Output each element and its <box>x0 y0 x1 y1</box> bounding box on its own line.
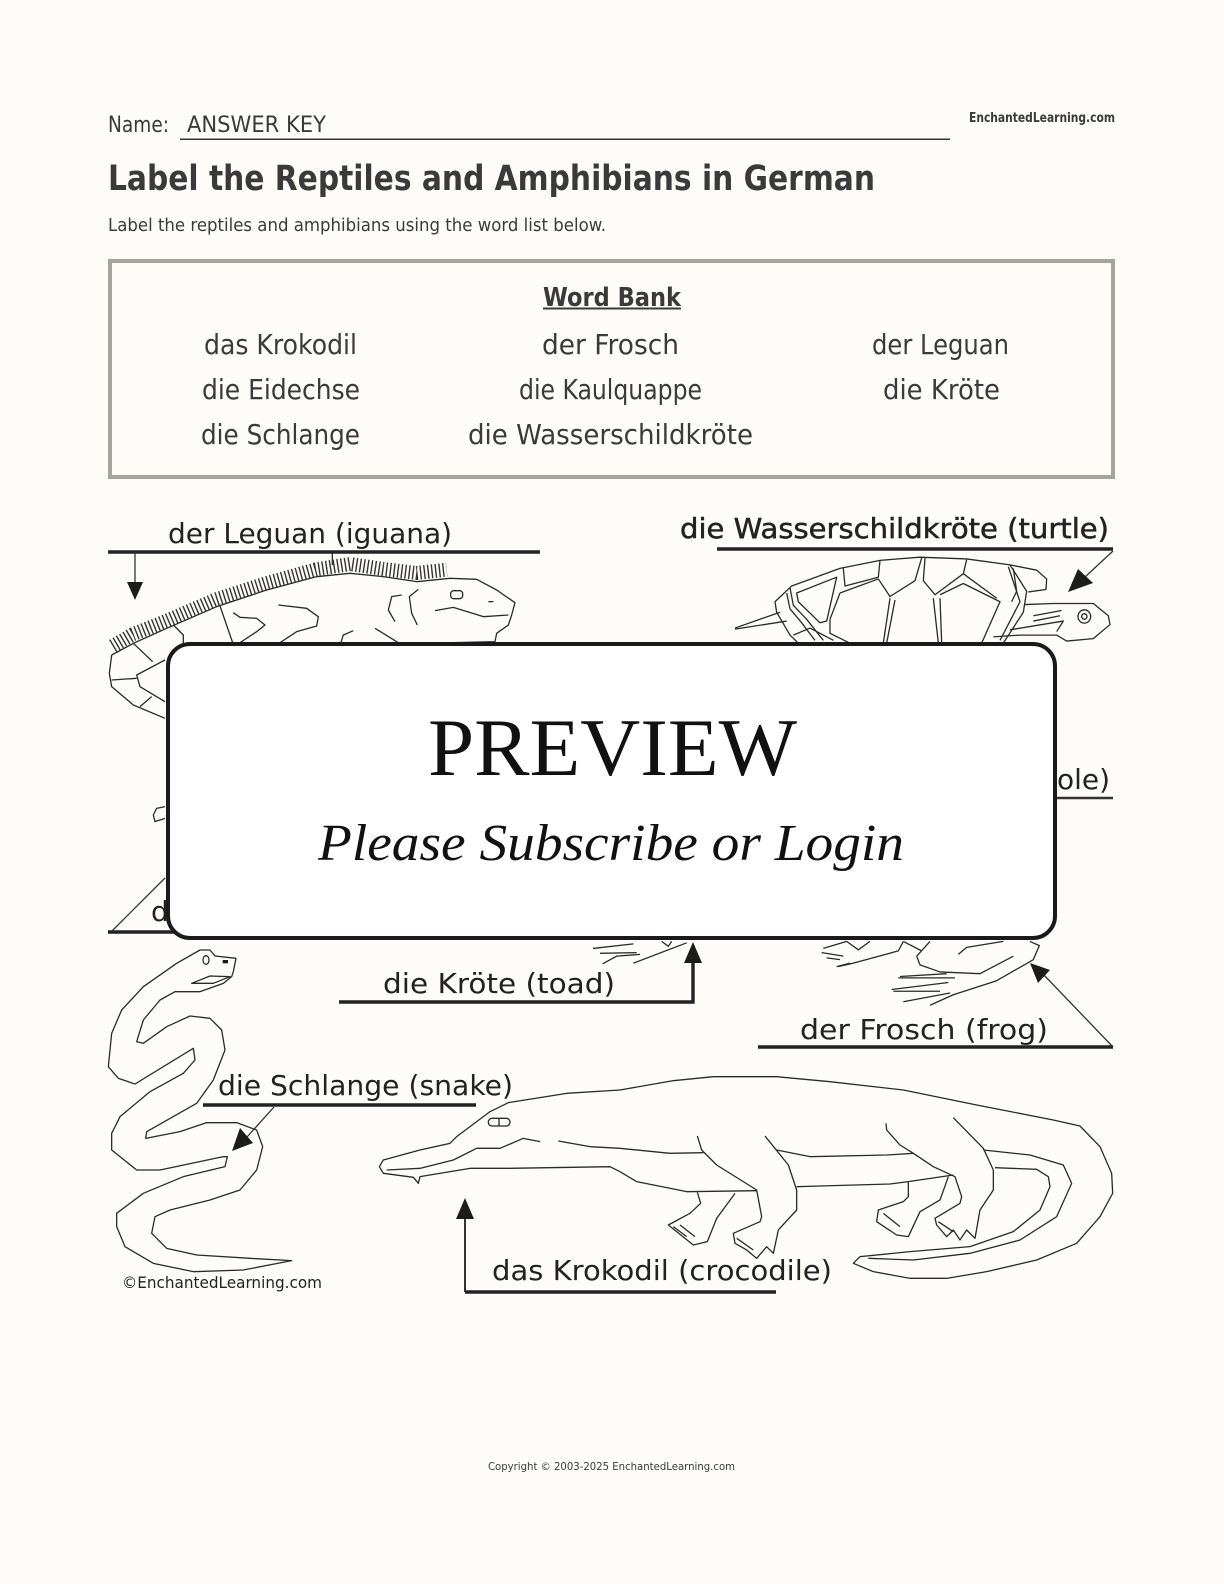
arrow: frog <box>1030 963 1113 1047</box>
word bank words: der Leguan <box>872 328 1009 361</box>
name field: Name: <box>108 113 169 138</box>
turtle label: die Wasserschildkröte (turtle) <box>680 512 1109 545</box>
crocodile label: das Krokodil (crocodile) <box>492 1254 832 1287</box>
arrow: iguana <box>127 552 143 600</box>
word bank words: die Wasserschildkröte <box>468 418 753 451</box>
image copyright: ©EnchantedLearning.com <box>122 1273 322 1292</box>
iguana drawing <box>109 553 515 822</box>
snake label: die Schlange (snake) <box>218 1069 513 1102</box>
title: Label the Reptiles and Amphibians in German <box>108 159 875 199</box>
toad drawing <box>593 941 687 964</box>
tadpole label fragment: ole) <box>1057 763 1110 796</box>
preview heading: PREVIEW <box>428 702 798 793</box>
toad label <box>339 960 693 1002</box>
word bank words: der Frosch <box>542 328 679 361</box>
crocodile body <box>620 1077 1113 1278</box>
lizard label fragment <box>108 878 175 932</box>
iguana label: der Leguan (iguana) <box>168 517 452 550</box>
frog label: der Frosch (frog) <box>800 1013 1048 1046</box>
panel: word bank <box>110 261 1113 477</box>
word bank words: das Krokodil <box>204 328 357 361</box>
word bank heading: Word Bank <box>543 283 682 313</box>
word bank words: die Kaulquappe <box>519 373 702 406</box>
turtle drawing <box>735 557 1110 643</box>
name field: ANSWER KEY <box>187 113 327 138</box>
arrow: turtle <box>1068 551 1113 592</box>
word bank words: die Eidechse <box>202 373 360 406</box>
crocodile drawing <box>379 1077 1113 1278</box>
toad label: die Kröte (toad) <box>383 967 615 1000</box>
word bank words <box>201 328 1009 451</box>
word bank words: die Kröte <box>883 373 1000 406</box>
site logo text: EnchantedLearning.com <box>969 111 1115 126</box>
frog drawing <box>822 941 1039 1005</box>
arrow: snake <box>232 1107 274 1151</box>
snake drawing <box>108 950 292 1272</box>
preview overlay panel <box>168 644 1055 938</box>
preview subheading: Please Subscribe or Login <box>317 815 904 872</box>
word bank words: die Schlange <box>201 418 360 451</box>
name field <box>108 113 950 140</box>
footer copyright: Copyright © 2003-2025 EnchantedLearning.com <box>488 1460 735 1473</box>
lizard label fragment: d <box>151 895 169 928</box>
arrow: toad <box>684 942 702 963</box>
arrow: crocodile <box>456 1198 474 1292</box>
instructions: Label the reptiles and amphibians using the word list below. <box>108 215 606 236</box>
crocodile head <box>379 1090 620 1183</box>
